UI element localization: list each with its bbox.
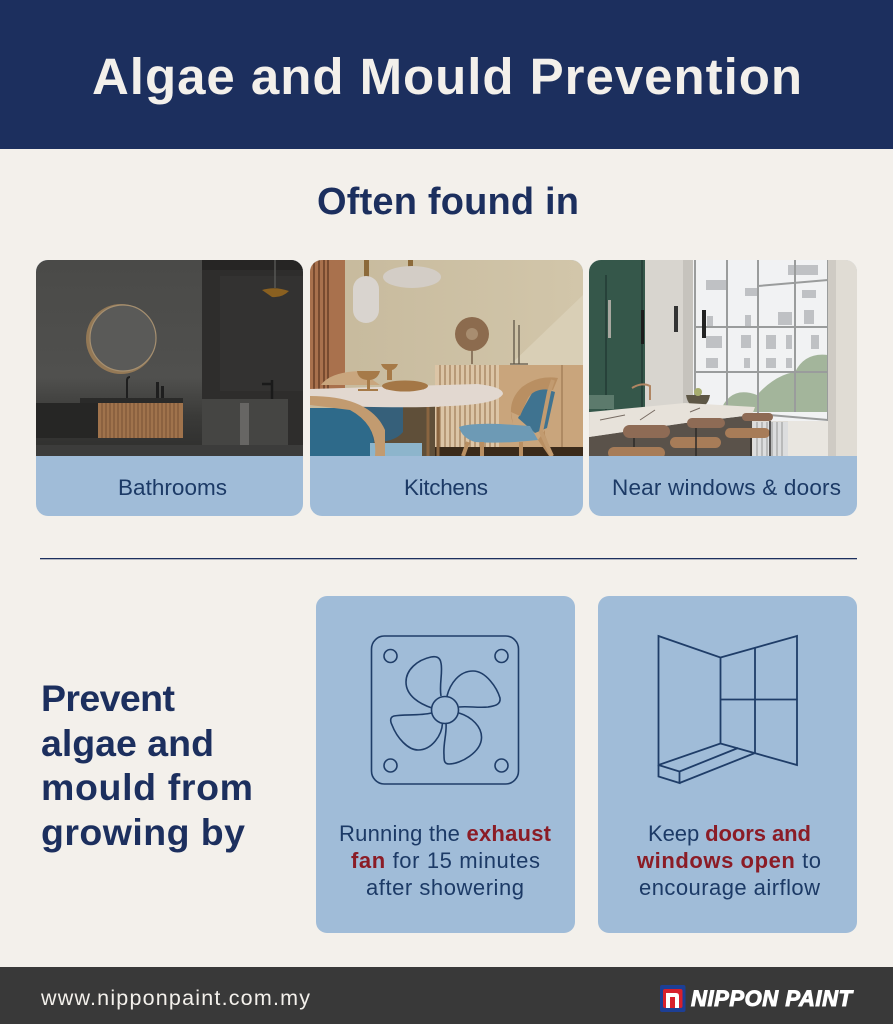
panel: doors and windows tip xyxy=(598,596,857,933)
panel: near windows and doors xyxy=(589,260,857,516)
panel: kitchens xyxy=(310,260,583,516)
tip text: windows open to xyxy=(636,848,821,873)
tip text xyxy=(636,821,821,900)
divider xyxy=(40,558,857,559)
panel: exhaust fan tip xyxy=(316,596,575,933)
back chair xyxy=(321,371,380,385)
tip text xyxy=(339,821,552,900)
header band with title xyxy=(0,0,893,149)
icon: exhaust fan xyxy=(372,636,518,784)
heading: prevent algae and mould: algae and xyxy=(41,722,214,764)
heading: often found in: Often found in xyxy=(317,181,579,223)
label: Bathrooms xyxy=(118,475,227,500)
logo: nippon paint: NIPPON PAINT xyxy=(691,986,854,1011)
footer band xyxy=(0,967,893,1024)
tip text: Running the exhaust xyxy=(339,821,552,846)
photo: kitchen with window xyxy=(589,260,857,459)
panel: bathrooms xyxy=(36,260,303,516)
label: Kitchens xyxy=(404,475,488,500)
photo: dark bathroom xyxy=(36,260,303,456)
right chair xyxy=(518,386,555,433)
tip text: Keep doors and xyxy=(648,821,811,846)
icon: window corner xyxy=(658,636,797,783)
photo: dining room xyxy=(310,260,583,456)
tip text: encourage airflow xyxy=(639,875,820,900)
heading: prevent algae and mould: mould from xyxy=(41,766,253,808)
heading: prevent algae and mould xyxy=(41,677,253,853)
header band with title: Algae and Mould Prevention xyxy=(92,48,802,105)
left chair xyxy=(310,408,377,456)
tip text: fan for 15 minutes xyxy=(351,848,540,873)
heading: prevent algae and mould: growing by xyxy=(41,811,245,853)
heading: prevent algae and mould: Prevent xyxy=(41,677,176,719)
tip text: after showering xyxy=(366,875,524,900)
label: Near windows & doors xyxy=(612,475,841,500)
table top xyxy=(310,384,503,407)
website url: www.nipponpaint.com.my xyxy=(40,986,310,1010)
